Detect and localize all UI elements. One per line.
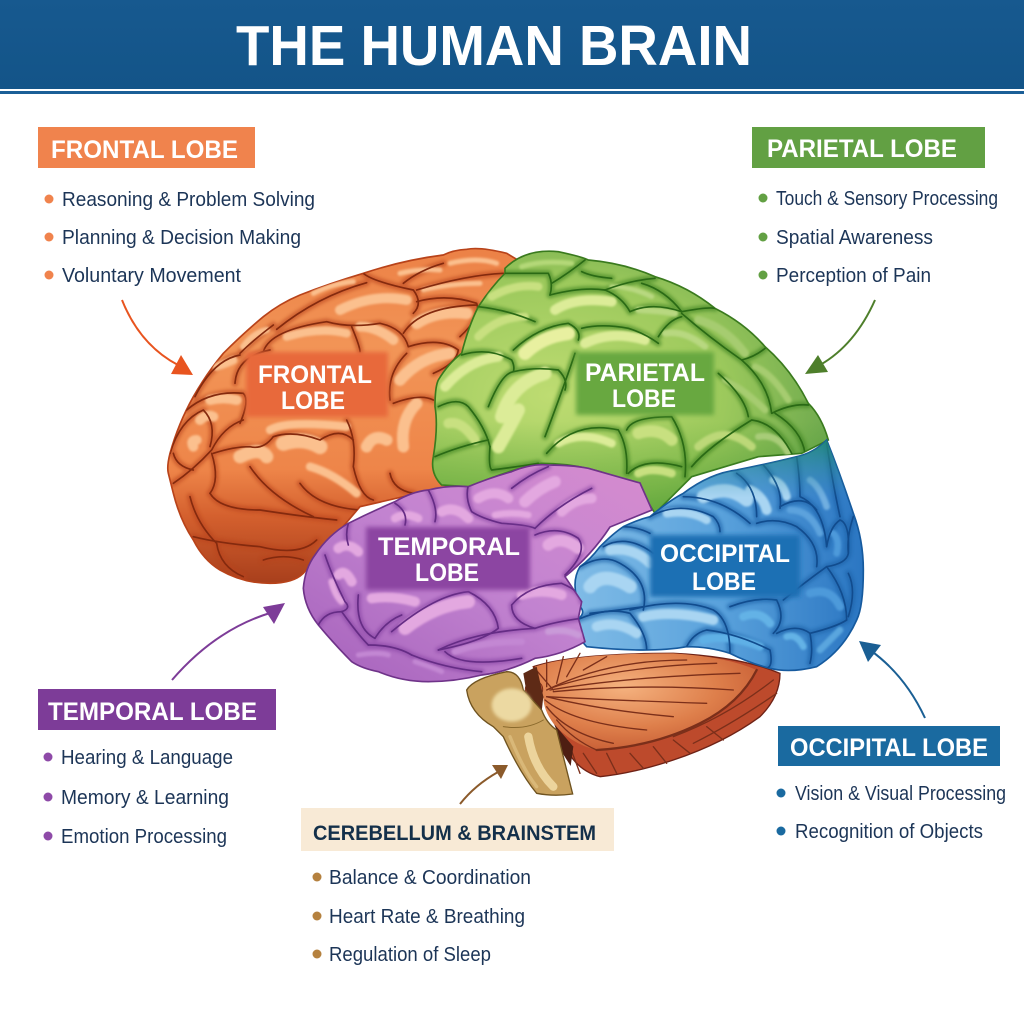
arrow: frontal bbox=[122, 300, 193, 375]
heading: TEMPORAL LOBE bbox=[48, 698, 257, 726]
in-brain label: temporal: TEMPORAL bbox=[378, 533, 520, 561]
in-brain label: frontal: LOBE bbox=[281, 387, 345, 415]
arrow: cerebellum bbox=[460, 765, 508, 804]
list: Regulation of Sleep bbox=[329, 944, 491, 966]
frontal lobe bbox=[168, 249, 523, 583]
list: Perception of Pain bbox=[776, 265, 931, 287]
heading: PARIETAL LOBE bbox=[767, 135, 957, 163]
occipital lobe bbox=[575, 440, 863, 670]
panel: temporal lobe bbox=[38, 689, 276, 848]
brainstem bbox=[467, 667, 573, 795]
list bbox=[312, 867, 531, 966]
list: Heart Rate & Breathing bbox=[329, 906, 525, 928]
title banner bbox=[0, 0, 1024, 94]
panel: cerebellum and brainstem bbox=[301, 808, 614, 966]
title: THE HUMAN BRAIN bbox=[236, 14, 752, 78]
list: Reasoning & Problem Solving bbox=[62, 189, 315, 211]
heading: FRONTAL LOBE bbox=[51, 136, 238, 164]
in-brain label: temporal bbox=[366, 527, 530, 590]
heading bbox=[778, 726, 1000, 766]
heading bbox=[38, 689, 276, 730]
in-brain label: occipital: LOBE bbox=[692, 568, 756, 596]
heading: CEREBELLUM & BRAINSTEM bbox=[313, 821, 596, 845]
arrow: temporal bbox=[172, 603, 285, 680]
list: Voluntary Movement bbox=[62, 265, 241, 287]
in-brain label: occipital: OCCIPITAL bbox=[660, 540, 790, 568]
temporal lobe bbox=[303, 465, 652, 682]
list: Spatial Awareness bbox=[776, 227, 933, 249]
list bbox=[758, 188, 998, 287]
list: Memory & Learning bbox=[61, 787, 229, 809]
cerebellum bbox=[525, 653, 780, 777]
arrow: parietal bbox=[805, 300, 875, 374]
list: Planning & Decision Making bbox=[62, 227, 301, 249]
in-brain label: frontal: FRONTAL bbox=[258, 361, 372, 389]
in-brain label: parietal: PARIETAL bbox=[585, 359, 705, 387]
heading bbox=[752, 127, 985, 168]
in-brain label: temporal: LOBE bbox=[415, 559, 479, 587]
panel: parietal lobe bbox=[752, 127, 998, 287]
brain illustration bbox=[168, 249, 863, 795]
list: Emotion Processing bbox=[61, 826, 227, 848]
arrow: occipital bbox=[859, 641, 925, 718]
in-brain label: frontal bbox=[246, 352, 388, 417]
parietal lobe bbox=[433, 251, 828, 513]
panel: frontal lobe bbox=[38, 127, 315, 287]
panel: occipital lobe bbox=[776, 726, 1006, 843]
list: Hearing & Language bbox=[61, 747, 233, 769]
in-brain label: parietal bbox=[576, 352, 714, 415]
list: Balance & Coordination bbox=[329, 867, 531, 889]
list: Recognition of Objects bbox=[795, 821, 983, 843]
list bbox=[44, 747, 233, 848]
in-brain label: occipital bbox=[650, 535, 800, 597]
heading bbox=[38, 127, 255, 168]
heading: OCCIPITAL LOBE bbox=[790, 734, 988, 762]
list bbox=[44, 189, 315, 287]
heading bbox=[301, 808, 614, 851]
list bbox=[776, 783, 1006, 843]
in-brain label: parietal: LOBE bbox=[612, 385, 676, 413]
